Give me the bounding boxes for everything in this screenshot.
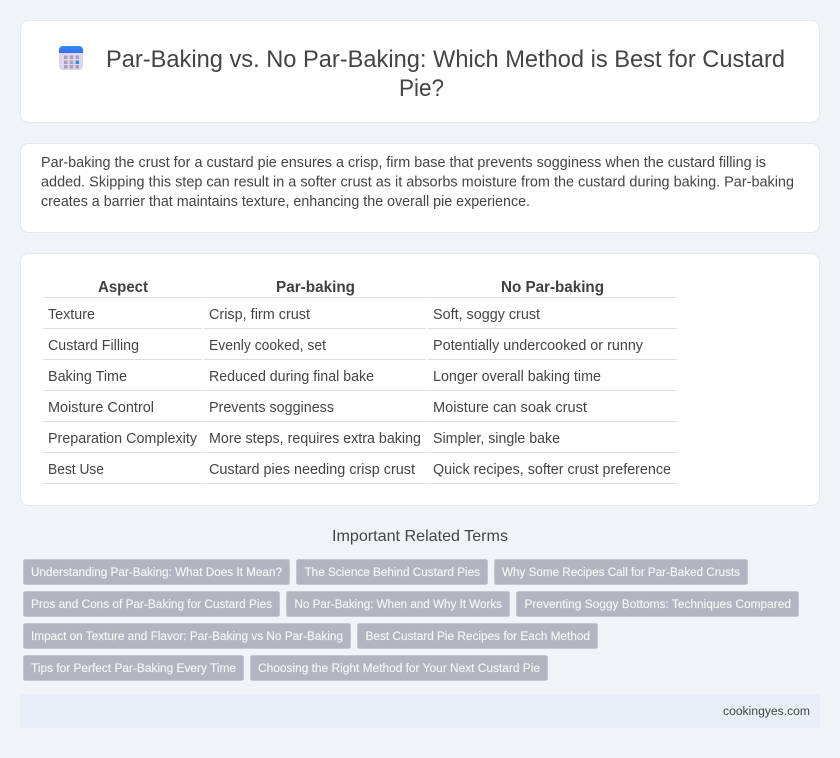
text block: introduction paragraph: added. Skipping this step can result in a softer crust as it absorbs moisture from the custard during baking. Par-baking (41, 174, 794, 190)
title (106, 46, 785, 102)
tag row 4: Tips for Perfect Par-Baking Every Time (31, 661, 236, 675)
table row: baking time: Baking Time (48, 369, 127, 385)
table row: moisture control: Moisture Control (48, 400, 154, 416)
tag row 1 (24, 560, 748, 584)
table row: baking time: Reduced during final bake (209, 369, 374, 385)
tag row 3: Impact on Texture and Flavor: Par-Baking vs No Par-Baking (31, 629, 343, 643)
title: Par-Baking vs. No Par-Baking: Which Method is Best for Custard (106, 46, 785, 73)
tag row 1: Why Some Recipes Call for Par-Baked Crusts (502, 565, 740, 579)
text block: introduction paragraph (41, 155, 794, 210)
table row: custard filling: Custard Filling (48, 338, 139, 354)
table row: texture: Crisp, firm crust (209, 307, 310, 323)
text block: introduction paragraph: Par-baking the crust for a custard pie ensures a crisp, firm base that prevents sogginess when the custard filling is (41, 155, 766, 171)
table row: best use: Custard pies needing crisp crust (209, 462, 415, 478)
table row: custard filling (48, 338, 644, 354)
table row: custard filling: Evenly cooked, set (209, 338, 326, 354)
table row: texture (48, 307, 540, 323)
table row: preparation complexity: More steps, requires extra baking (209, 431, 421, 447)
table row: preparation complexity: Simpler, single bake (433, 431, 560, 447)
panel: introduction (20, 144, 820, 232)
table row: moisture control: Moisture can soak crust (433, 400, 587, 416)
tag row 3 (24, 624, 598, 648)
tag row 2 (24, 592, 798, 616)
tag row 2: Pros and Cons of Par-Baking for Custard Pies (31, 597, 272, 611)
tag row 2: Preventing Soggy Bottoms: Techniques Compared (524, 597, 791, 611)
tag row 4 (24, 656, 548, 680)
table row: custard filling: Potentially undercooked or runny (433, 338, 644, 354)
icon: calendar (59, 46, 83, 70)
title: Pie? (399, 75, 444, 102)
tag row 4: Choosing the Right Method for Your Next Custard Pie (258, 661, 540, 675)
heading: important related terms: Important Related Terms (332, 528, 508, 545)
table row: best use: Best Use (48, 462, 104, 478)
table row: moisture control: Prevents sogginess (209, 400, 334, 416)
panel: title card (20, 20, 820, 122)
tag row 3: Best Custard Pie Recipes for Each Method (366, 629, 590, 643)
panel: related term tags (24, 560, 798, 680)
table header: Par-baking (276, 279, 355, 296)
tag row 1: The Science Behind Custard Pies (304, 565, 480, 579)
table row: best use (48, 462, 671, 478)
tag row 1: Understanding Par-Baking: What Does It Mean? (31, 565, 282, 579)
table row: preparation complexity (48, 431, 560, 447)
table header: No Par-baking (501, 279, 604, 296)
table row: moisture control (48, 400, 587, 416)
table header (98, 279, 604, 296)
table row: texture: Texture (48, 307, 95, 323)
footer source text: cookingyes.com (723, 704, 810, 718)
table row: baking time (48, 369, 601, 385)
table row: best use: Quick recipes, softer crust preference (433, 462, 671, 478)
text block: introduction paragraph: creates a barrier that maintains texture, enhancing the overall pie experience. (41, 194, 530, 210)
table row: preparation complexity: Preparation Complexity (48, 431, 198, 447)
table row: texture: Soft, soggy crust (433, 307, 540, 323)
tag row 2: No Par-Baking: When and Why It Works (294, 597, 502, 611)
panel: comparison table (20, 254, 820, 506)
table row: baking time: Longer overall baking time (433, 369, 601, 385)
footer bar (20, 694, 820, 728)
table header: Aspect (98, 279, 149, 296)
